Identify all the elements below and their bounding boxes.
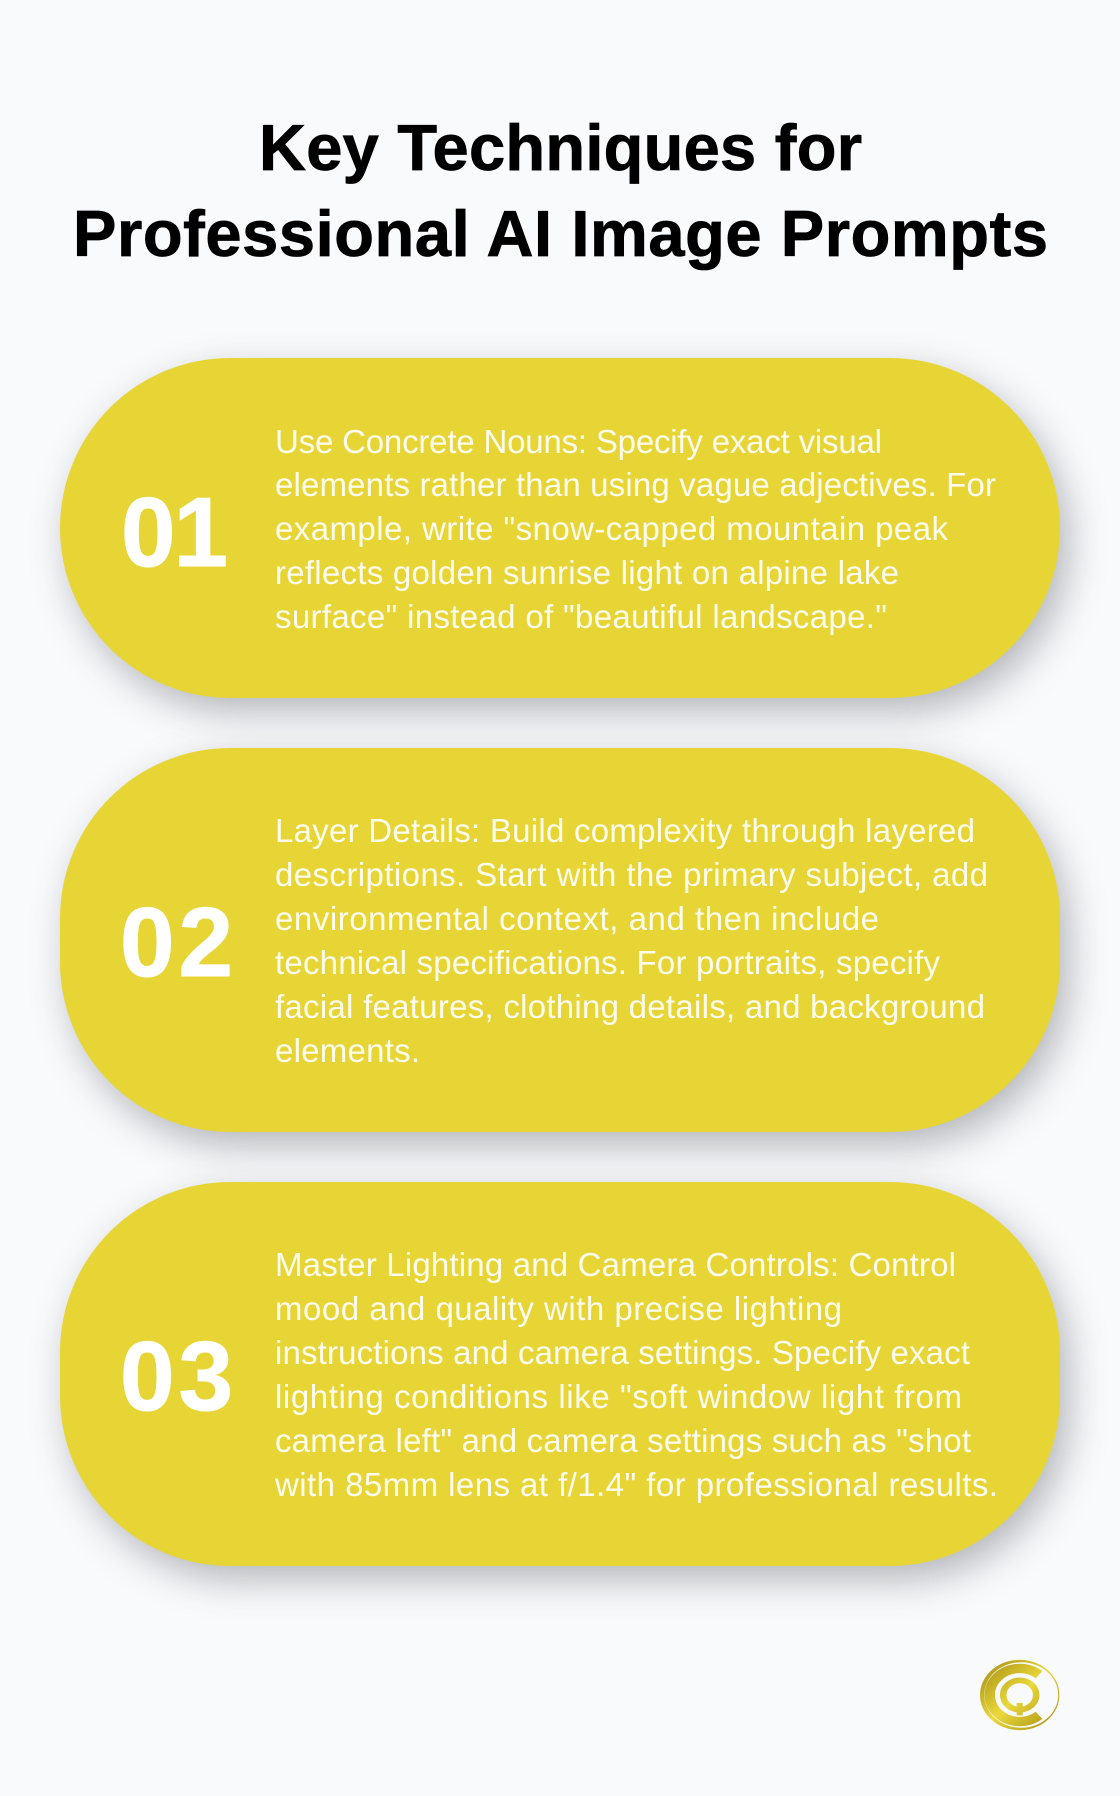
number 01: 01 — [121, 477, 228, 587]
title: Key Techniques for — [259, 111, 862, 184]
text: use concrete nouns: example, write "snow-capped mountain peak — [275, 510, 948, 547]
text: use concrete nouns: Use Concrete Nouns: Specify exact visual — [275, 423, 882, 460]
text: layer details: elements. — [275, 1032, 420, 1069]
text: master lighting and camera controls: lighting conditions like "soft window light from — [275, 1378, 962, 1415]
text: use concrete nouns — [275, 423, 996, 635]
text: master lighting and camera controls: Master Lighting and Camera Controls: Control — [275, 1246, 956, 1283]
text: layer details — [275, 812, 988, 1069]
panel: technique 01 — [60, 358, 1060, 698]
text: master lighting and camera controls — [274, 1246, 998, 1503]
text: use concrete nouns: surface" instead of "beautiful landscape." — [275, 598, 887, 635]
text: master lighting and camera controls: mood and quality with precise lighting — [275, 1290, 842, 1327]
panel: technique 03 — [60, 1182, 1060, 1566]
icon: gold CQ logo — [980, 1660, 1059, 1730]
text: master lighting and camera controls: instructions and camera settings. Specify exact — [275, 1334, 970, 1371]
title — [73, 111, 1048, 270]
number 03: 03 — [120, 1321, 233, 1431]
text: layer details: Layer Details: Build complexity through layered — [275, 812, 975, 849]
text: layer details: facial features, clothing details, and background — [275, 988, 985, 1025]
title: Professional AI Image Prompts — [73, 197, 1048, 270]
panel: technique 02 — [60, 748, 1060, 1132]
text: master lighting and camera controls: camera left" and camera settings such as "shot — [275, 1422, 971, 1459]
text: layer details: technical specifications. For portraits, specify — [275, 944, 940, 981]
text: use concrete nouns: reflects golden sunrise light on alpine lake — [275, 554, 899, 591]
text: master lighting and camera controls: with 85mm lens at f/1.4" for professional results. — [274, 1466, 998, 1503]
text: use concrete nouns: elements rather than using vague adjectives. For — [275, 466, 996, 503]
number 02: 02 — [120, 887, 233, 997]
text: layer details: descriptions. Start with the primary subject, add — [275, 856, 988, 893]
text: layer details: environmental context, and then include — [275, 900, 879, 937]
